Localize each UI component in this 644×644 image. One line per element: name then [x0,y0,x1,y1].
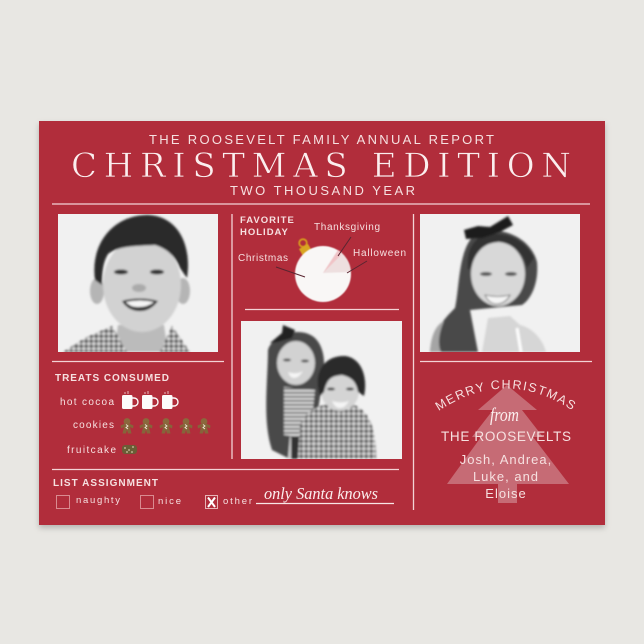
photo: boy portrait [58,214,218,352]
card shadow [39,124,605,528]
cookies row: cookies [73,420,114,431]
checkbox: naughty [56,495,120,508]
checkbox: other, checked [206,496,252,508]
fruitcake row: fruitcake [67,445,116,456]
panel: list assignment [53,478,394,508]
icon: christmas tree [447,385,569,503]
red card [39,121,605,525]
panel: treats consumed [55,373,210,456]
names: Eloise [485,486,527,501]
label: Halloween: Halloween [353,248,406,259]
hot cocoa row [60,391,178,409]
header block [71,132,571,198]
checkbox: nice: nice [158,496,181,507]
chart heading: FAVORITE [240,215,295,226]
chart heading: HOLIDAY [240,227,289,238]
hot cocoa row: hot cocoa [60,397,114,408]
handwritten answer: only Santa knows [264,484,378,503]
names: Josh, Andrea, [460,452,552,467]
divider lines [52,204,592,510]
report line: THE ROOSEVELT FAMILY ANNUAL REPORT [149,132,494,147]
panel: greeting [435,380,576,503]
from: from [490,405,519,426]
checkbox: naughty: naughty [76,495,120,506]
photo: girl portrait [420,214,580,352]
names: Luke, and [473,469,539,484]
checkbox: other, checked: other [223,496,252,507]
infographic card scene [36,121,608,531]
photo: siblings together [241,321,402,459]
answer line [256,502,394,504]
panel: favorite holiday chart [238,215,406,302]
checkbox: nice [140,496,181,508]
icon: ornament cap [299,239,312,256]
year line: TWO THOUSAND YEAR [230,183,415,198]
list heading: LIST ASSIGNMENT [53,478,158,489]
pointer lines [276,237,367,277]
label: Thanksgiving: Thanksgiving [314,222,380,233]
treats heading: TREATS CONSUMED [55,373,169,384]
arched greeting: MERRY CHRISTMAS [435,380,576,410]
pie chart ornament [295,246,351,302]
label: Christmas: Christmas [238,253,288,264]
family name: THE ROOSEVELTS [441,429,571,444]
cookies row [73,418,210,434]
title: CHRISTMAS EDITION [71,146,571,186]
